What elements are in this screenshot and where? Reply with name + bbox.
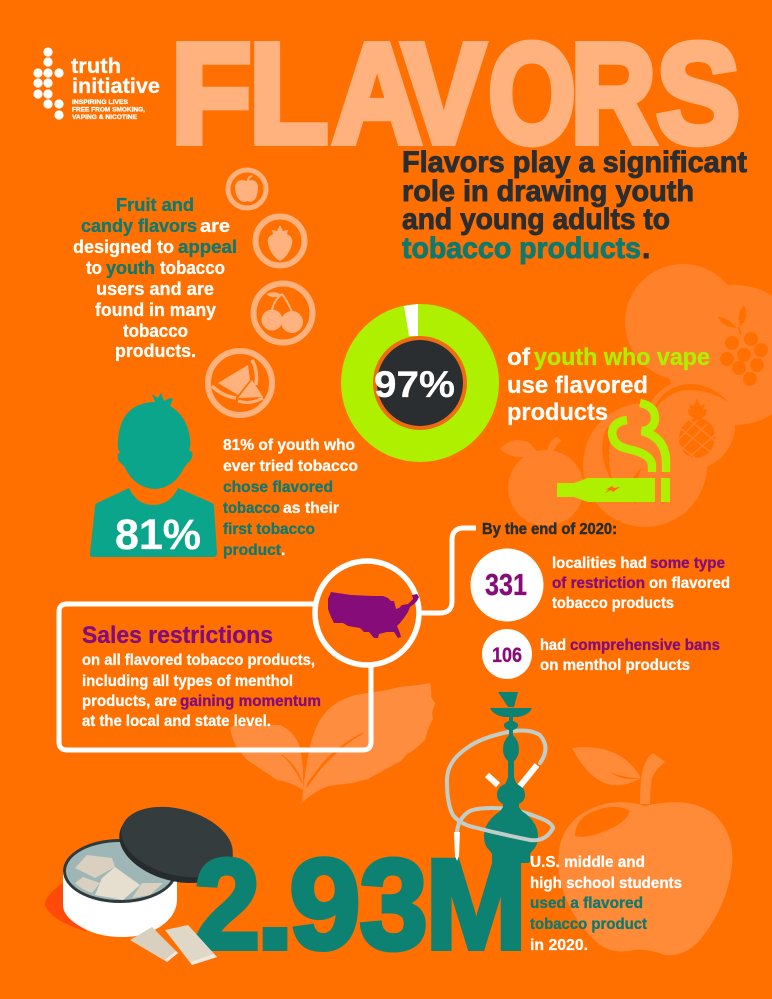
text block: middle and high school students: U.S. middle and (530, 854, 645, 871)
title: FLAVORS: R (571, 14, 656, 172)
logo: truth initiative (33, 47, 160, 121)
text block: fruit and candy flavors: found in many (95, 300, 216, 320)
logo: truth initiative: truth (71, 55, 121, 78)
background fruit: leaves (230, 683, 435, 803)
text block: fruit and candy flavors: to (86, 258, 102, 278)
panel: sales restrictions (59, 604, 371, 750)
statistic: 331 localities: 331 (485, 567, 527, 602)
text block: youth who vape: products (507, 399, 608, 426)
text block: youth who vape: use flavored (507, 372, 648, 399)
text block: fruit and candy flavors: youth (106, 258, 155, 278)
text block: fruit and candy flavors: tobacco (123, 321, 188, 341)
text block: youth who vape: of (507, 344, 531, 371)
text block: fruit and candy flavors: designed to (73, 237, 174, 257)
text block: youth who vape: youth who vape (534, 344, 710, 371)
text block: fruit and candy flavors: are (200, 216, 230, 236)
icon: cherries (254, 284, 312, 342)
icon: hookah (447, 692, 553, 863)
title: FLAVORS: F (171, 15, 251, 172)
text block: 81% of youth: tobacco (223, 500, 280, 517)
donut chart: 97% (341, 304, 499, 462)
statistic: 2.93M: 9 (289, 834, 361, 976)
statistic: 2.93M: 3 (360, 832, 428, 976)
title: FLAVORS: L (249, 15, 328, 172)
statistic: 331 localities: of restriction (552, 575, 645, 592)
text block: middle and high school students: in 2020. (530, 937, 588, 954)
statistic: 106 menthol bans: on menthol products (540, 657, 690, 674)
statistic: 2.93M: 2 (194, 833, 260, 977)
text block: 81% of youth: . (281, 542, 285, 559)
title: FLAVORS (171, 14, 740, 173)
text block: 81% of youth (223, 437, 358, 559)
text block: 81% of youth: ever tried tobacco (223, 458, 358, 475)
statistic: 2.93M (194, 832, 527, 977)
icon: youth silhouette with 81% (90, 393, 217, 559)
subheading: tobacco products (402, 232, 641, 265)
text block: youth who vape (507, 344, 710, 426)
text block: fruit and candy flavors: appeal (178, 237, 237, 257)
subheading: . (642, 232, 650, 265)
panel: sales restrictions: products, are (82, 693, 177, 710)
background fruit: grapes, pineapple and peach (500, 264, 772, 527)
panel: sales restrictions: gaining momentum (180, 693, 321, 710)
statistic: 331 localities: on flavored (649, 575, 730, 592)
text block: middle and high school students: tobacco product (530, 916, 648, 933)
logo: truth initiative: VAPING & NICOTINE (72, 115, 137, 121)
text block: middle and high school students: high school students (530, 875, 682, 892)
text block: fruit and candy flavors: Fruit and (116, 195, 194, 215)
icon: vape pen (557, 403, 670, 502)
icon: strawberry (256, 216, 304, 266)
heading: by the end of 2020: By the end of 2020: (482, 521, 617, 538)
text block: 81% of youth: product (223, 542, 282, 559)
text block: 81% of youth: first tobacco (223, 521, 315, 538)
text block: 81% of youth: as their (283, 500, 339, 517)
icon: watermelon (208, 351, 272, 415)
statistic: 2.93M: M (426, 834, 527, 976)
text block: fruit and candy flavors: products. (115, 341, 196, 361)
text block: middle and high school students (530, 854, 682, 954)
icon: loose nicotine pouches (130, 925, 217, 965)
icon: apple (228, 170, 266, 208)
statistic: 106 menthol bans (482, 629, 720, 679)
text block: 81% of youth: 81% of youth who (223, 437, 355, 454)
statistic: 106 menthol bans: 106 (492, 644, 522, 667)
statistic: 106 menthol bans: comprehensive bans (570, 637, 720, 654)
statistic: 2.93M: . (256, 834, 294, 977)
logo dots (33, 47, 64, 120)
logo: truth initiative: FREE FROM SMOKING, (72, 108, 145, 114)
subheading: Flavors play a significant (402, 146, 747, 179)
text block: fruit and candy flavors: users and are (96, 279, 214, 299)
title: FLAVORS: V (402, 15, 485, 173)
panel: sales restrictions: on all flavored tobacco products, (82, 652, 315, 669)
subheading: role in drawing youth (402, 175, 694, 208)
background fruit: apple (558, 747, 732, 955)
panel: sales restrictions: at the local and state level. (82, 713, 271, 730)
text block: middle and high school students: used a flavored (530, 895, 643, 912)
title: FLAVORS: S (657, 15, 740, 173)
leaf veins (282, 733, 363, 787)
subheading: and young adults to (402, 203, 670, 236)
title: FLAVORS: A (332, 15, 422, 173)
connector line to statistics (420, 528, 476, 613)
title: FLAVORS: O (488, 15, 576, 172)
text block: fruit and candy flavors (73, 195, 237, 361)
statistic: 331 localities: tobacco products (552, 595, 674, 612)
logo: truth initiative: initiative (72, 75, 160, 98)
icon: map of the United States (315, 561, 419, 665)
panel: sales restrictions: Sales restrictions (82, 622, 273, 649)
panel: sales restrictions: including all types of menthol (82, 673, 293, 690)
statistic: 331 localities (470, 548, 730, 622)
logo: truth initiative: INSPIRING LIVES (72, 100, 128, 106)
icon: nicotine pouch tin (45, 795, 241, 937)
text block: fruit and candy flavors: tobacco (160, 258, 225, 278)
donut chart: 97%: 97% (374, 364, 455, 405)
subheading (402, 146, 747, 265)
statistic: 331 localities: some type (650, 555, 725, 572)
statistic: 331 localities: localities had (552, 555, 647, 572)
icon: youth silhouette with 81%: 81% (115, 511, 201, 559)
text block: fruit and candy flavors: candy flavors (81, 216, 197, 236)
text block: 81% of youth: chose flavored (223, 479, 333, 496)
statistic: 106 menthol bans: had (540, 637, 566, 654)
